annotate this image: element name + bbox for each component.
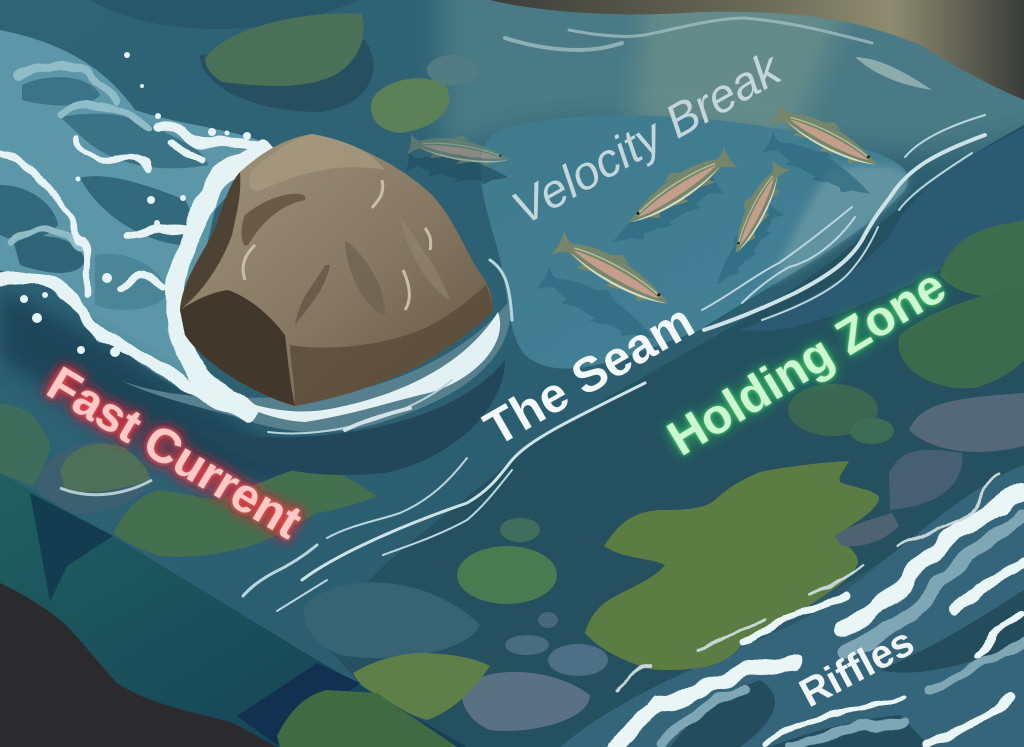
fish group (405, 98, 886, 350)
dark holding channel (320, 125, 1024, 747)
upper water tone and sun haze (440, 0, 1024, 160)
dark top-left water shapes (90, 0, 360, 29)
riffles whitewater (615, 475, 1024, 747)
right moss banks (788, 220, 1024, 510)
fish shadows (405, 127, 878, 350)
slate rock on moss (834, 513, 899, 546)
pools between foam (0, 77, 208, 310)
dark riffle valleys (670, 590, 1024, 747)
foam droplets (20, 52, 472, 370)
white wash around boulder base (210, 312, 500, 422)
mossy rocks upper (200, 13, 479, 133)
pale seam water (770, 165, 908, 285)
dark blue upper channel (740, 128, 1024, 331)
large moss rock (585, 461, 879, 670)
boulder wake shadow (200, 360, 505, 475)
riffle water (560, 465, 1024, 747)
dark water around fast current (0, 290, 340, 486)
label: Fast Current: Fast Current (38, 357, 310, 549)
label: Riffles: Riffles (793, 620, 921, 716)
label: The Seam: The Seam (476, 294, 703, 457)
foam foreground strokes (268, 260, 512, 433)
wake grey band (120, 300, 511, 432)
water light zone behind foam (0, 30, 270, 410)
lower-left bank and moss (0, 403, 467, 747)
pale water streak (855, 57, 932, 90)
trout (618, 142, 740, 233)
boulder (180, 134, 493, 406)
seam current lines (243, 18, 985, 611)
label: Velocity Break: Velocity Break (503, 40, 791, 235)
lower mid rocks (304, 518, 608, 731)
calm pool: velocity break (481, 115, 908, 369)
top bank (490, 0, 1024, 100)
whitewater left of boulder (0, 65, 268, 415)
label: Holding Zone: Holding Zone (659, 259, 955, 466)
